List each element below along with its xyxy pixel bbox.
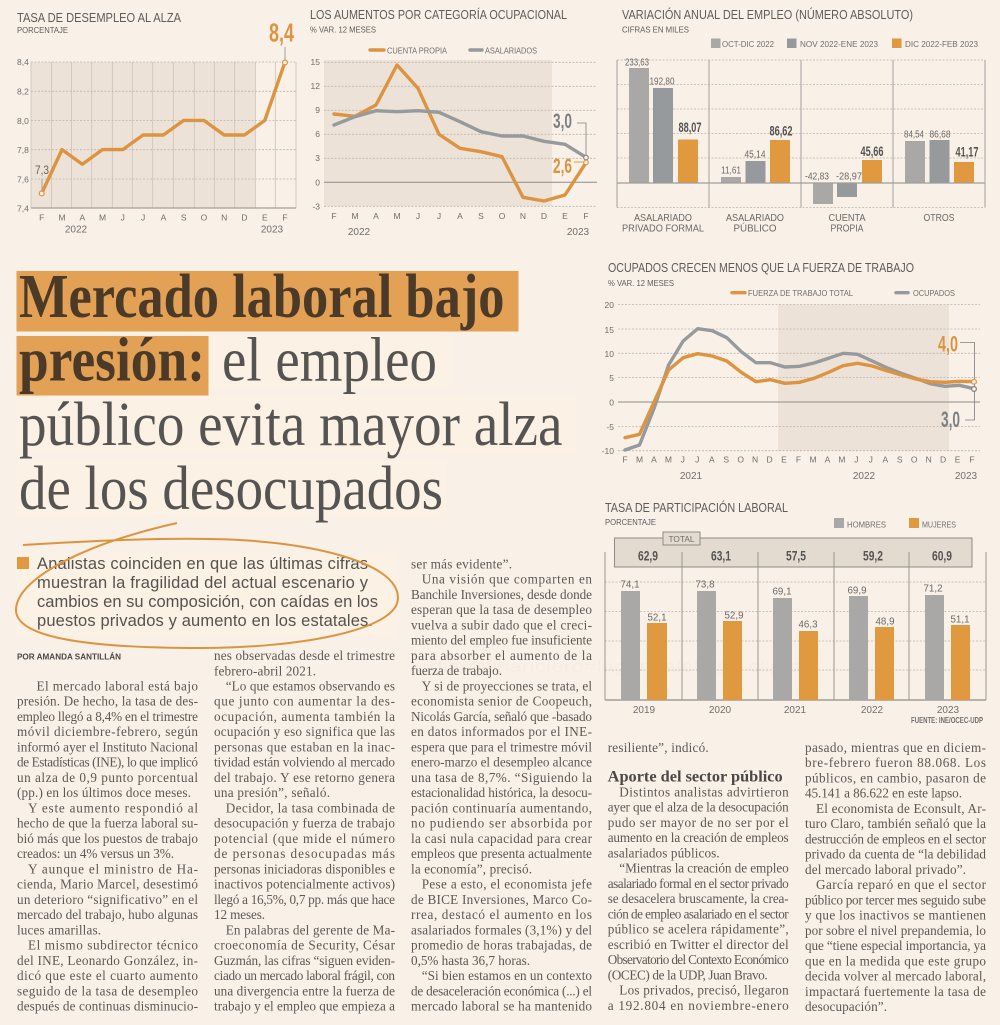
- chart: los aumentos por categoría ocupacional: 15: [311, 57, 320, 67]
- text column 3: enero-marzo el desempleo alcance: [411, 755, 592, 770]
- text column 1: Y este aumento respondió al: [28, 800, 198, 815]
- chart: ocupados crecen menos que la fuerza de trabajo: A: [825, 454, 831, 464]
- callout: bajada: Analistas coinciden en que las últimas cifras: [37, 555, 368, 573]
- text column 4: Aporte del sector público: [608, 769, 783, 786]
- chart: variación anual del empleo: -42,83: [805, 171, 829, 182]
- text column 1: bió más que los puestos de trabajo: [17, 831, 198, 846]
- text column 1: del INE, Leonardo González, in-: [17, 953, 198, 968]
- text column 1: un deterioro “significativo” en el: [17, 892, 198, 907]
- text column 3: promedio de horas trabajadas, de: [411, 938, 592, 953]
- chart: los aumentos por categoría ocupacional: 2022: [348, 227, 371, 238]
- text column 3: Nicolás García, señaló que -basado: [411, 709, 592, 724]
- text column 4: ción de empleo asalariado en el sector: [608, 906, 789, 921]
- chart: variación anual del empleo: VARIACIÓN ANUAL DEL EMPLEO (NÚMERO ABSOLUTO): [622, 7, 913, 22]
- chart: ocupados crecen menos que la fuerza de trabajo: O: [911, 454, 918, 464]
- chart: ocupados crecen menos que la fuerza de trabajo: 3,0: [941, 407, 960, 432]
- text column 3: “Si bien estamos en un contexto: [422, 968, 592, 983]
- chart: variación anual del empleo: -28,97: [836, 171, 862, 182]
- text column 3: la casi nula capacidad para crear: [411, 831, 593, 846]
- chart: tasa de participación laboral: 2019: [633, 705, 656, 716]
- text column 4: (OCEC) de la UDP, Juan Bravo.: [608, 967, 768, 982]
- chart: los aumentos por categoría ocupacional: F: [331, 211, 337, 221]
- text column 5: García reparó en que el sector: [816, 877, 987, 892]
- text column 5: y que los inactivos se mantienen: [805, 908, 986, 923]
- text column 5: privado da cuenta de “la debilidad: [805, 847, 986, 862]
- chart: ocupados crecen menos que la fuerza de trabajo: F: [796, 454, 801, 464]
- text column 4: se desacelera bruscamente, la crea-: [608, 891, 789, 906]
- chart: variación anual del empleo: 45,14: [744, 150, 766, 161]
- chart: tasa de participación laboral: 57,5: [786, 548, 806, 564]
- chart: tasa de participación laboral: PORCENTAJE: [605, 517, 656, 527]
- chart: los aumentos por categoría ocupacional: % VAR. 12 MESES: [310, 24, 376, 34]
- text column 3: rrea, destacó el aumento en los: [411, 907, 592, 922]
- text column 2: que junto con aumentar la des-: [214, 694, 395, 709]
- text column 3: una tasa de 8,7%. “Siguiendo la: [411, 770, 592, 785]
- chart: variación anual del empleo: PROPIA: [830, 224, 864, 234]
- text column 3: [411, 556, 593, 1014]
- headline: el empleo: [222, 326, 437, 394]
- text column 3: para absorber el aumento de la: [411, 648, 592, 663]
- text column 4: Observatorio del Contexto Económico: [608, 952, 789, 967]
- chart: tasa de desempleo al alza: A: [161, 212, 167, 222]
- chart: tasa de desempleo al alza: F: [39, 212, 44, 222]
- chart: tasa de desempleo al alza: 8,4: [269, 18, 294, 48]
- text column 5: impactará fuertemente la tasa de: [805, 984, 986, 999]
- chart: ocupados crecen menos que la fuerza de trabajo: D: [767, 454, 773, 464]
- chart: tasa de desempleo al alza: A: [79, 212, 85, 222]
- chart: variación anual del empleo: DIC 2022-FEB 2023: [905, 39, 978, 49]
- chart: tasa de participación laboral: 52,1: [648, 613, 667, 624]
- chart: variación anual del empleo: [617, 7, 985, 234]
- chart: ocupados crecen menos que la fuerza de trabajo: M: [636, 454, 643, 464]
- text column 5: [805, 740, 987, 1014]
- chart: tasa de participación laboral: MUJERES: [922, 520, 956, 530]
- chart: ocupados crecen menos que la fuerza de trabajo: 4,0: [938, 332, 958, 357]
- text column 2: personas que estaban en la inac-: [214, 740, 395, 754]
- chart: tasa de desempleo al alza: 8,4: [17, 57, 29, 67]
- chart: variación anual del empleo: PRIVADO FORMAL: [622, 224, 704, 234]
- text column 3: de BICE Inversiones, Marco Co-: [411, 892, 592, 907]
- text column 3: Y si de proyecciones se trata, el: [422, 678, 592, 694]
- chart: variación anual del empleo: PÚBLICO: [734, 222, 777, 234]
- text column 3: pación continuaría aumentando,: [411, 800, 592, 815]
- text column 4: resiliente”, indicó.: [608, 740, 709, 755]
- chart: los aumentos por categoría ocupacional: N: [520, 211, 526, 221]
- chart: ocupados crecen menos que la fuerza de trabajo: N: [926, 454, 932, 464]
- text column 1: [17, 678, 198, 1014]
- chart: los aumentos por categoría ocupacional: 12: [311, 81, 320, 91]
- chart: ocupados crecen menos que la fuerza de trabajo: 2021: [680, 471, 703, 482]
- chart: ocupados crecen menos que la fuerza de trabajo: M: [665, 454, 672, 464]
- chart: ocupados crecen menos que la fuerza de trabajo: J: [681, 454, 685, 464]
- chart: tasa de desempleo al alza: M: [58, 212, 66, 222]
- chart: ocupados crecen menos que la fuerza de trabajo: N: [752, 454, 758, 464]
- chart: variación anual del empleo: 192,80: [650, 76, 675, 87]
- chart: tasa de desempleo al alza: 8,2: [17, 86, 29, 96]
- callout: bajada: cambios en su composición, con caídas en los: [37, 593, 378, 611]
- text column 4: escribió en Twitter el director del: [608, 937, 789, 952]
- chart: tasa de desempleo al alza: O: [201, 212, 208, 222]
- chart: tasa de participación laboral: 52,9: [724, 611, 744, 622]
- text column 1: El mismo subdirector técnico: [28, 938, 198, 953]
- text column 2: desocupación y fuerza de trabajo: [214, 816, 395, 831]
- callout: bajada: muestran la fragilidad del actual escenario y: [37, 574, 369, 592]
- text column 3: no pudiendo ser absorbida por: [411, 816, 593, 831]
- text column 1: Y aunque el ministro de Ha-: [28, 861, 198, 876]
- chart: variación anual del empleo: CIFRAS EN MILES: [622, 24, 689, 34]
- text column 4: Los privados, precisó, llegaron: [619, 983, 789, 998]
- text column 1: de Estadísticas (INE), lo que implicó: [17, 755, 198, 770]
- chart: ocupados crecen menos que la fuerza de trabajo: M: [838, 454, 845, 464]
- chart: los aumentos por categoría ocupacional: J: [437, 211, 441, 221]
- text column 2: 12 meses.: [214, 907, 265, 922]
- text column 1: un alza de 0,9 punto porcentual: [17, 770, 198, 785]
- chart: los aumentos por categoría ocupacional: 9: [315, 105, 320, 115]
- text column 3: en datos informados por el INE-: [411, 724, 592, 739]
- text column 3: vuelva a subir dado que el creci-: [411, 618, 592, 632]
- text column 2: una divergencia entre la fuerza de: [214, 983, 395, 998]
- chart: ocupados crecen menos que la fuerza de trabajo: 5: [609, 373, 614, 383]
- chart: tasa de desempleo al alza: N: [221, 212, 227, 222]
- text column 3: Pese a esto, el economista jefe: [422, 877, 592, 892]
- chart: variación anual del empleo: CUENTA: [828, 213, 866, 224]
- chart: tasa de participación laboral: 63,1: [711, 548, 731, 564]
- chart: tasa de participación laboral: 2021: [784, 705, 807, 716]
- chart: tasa de participación laboral: 59,2: [863, 548, 883, 564]
- text column 5: públicos, en cambio, pasaron de: [805, 770, 986, 786]
- chart: tasa de participación laboral: 2020: [709, 705, 732, 716]
- chart: ocupados crecen menos que la fuerza de trabajo: OCUPADOS: [913, 288, 955, 298]
- chart: ocupados crecen menos que la fuerza de trabajo: F: [969, 454, 975, 464]
- text column 5: desocupación”.: [805, 999, 887, 1014]
- text column 4: a 192.804 en noviembre-enero: [608, 998, 789, 1013]
- chart: ocupados crecen menos que la fuerza de trabajo: M: [809, 454, 817, 464]
- chart: los aumentos por categoría ocupacional: J: [416, 211, 420, 221]
- text column 1: móvil diciembre-febrero, según: [17, 724, 198, 739]
- chart: los aumentos por categoría ocupacional: 3: [315, 153, 320, 163]
- text column 1: luces amarillas.: [17, 922, 101, 937]
- text column 5: destrucción de empleos en el sector: [805, 831, 987, 846]
- chart: ocupados crecen menos que la fuerza de trabajo: J: [695, 454, 699, 464]
- text column 2: Decidor, la tasa combinada de: [226, 800, 395, 815]
- chart: ocupados crecen menos que la fuerza de trabajo: O: [737, 454, 744, 464]
- chart: tasa de participación laboral: 74,1: [620, 580, 640, 591]
- chart: tasa de desempleo al alza: PORCENTAJE: [17, 25, 68, 35]
- headline: público evita mayor alza: [19, 391, 562, 459]
- chart: tasa de desempleo al alza: 2022: [65, 225, 88, 236]
- chart: tasa de desempleo al alza: 2023: [261, 225, 284, 236]
- chart: los aumentos por categoría ocupacional: [310, 7, 597, 238]
- chart: los aumentos por categoría ocupacional: LOS AUMENTOS POR CATEGORÍA OCUPACIONAL: [310, 7, 567, 22]
- chart: tasa de participación laboral: 71,2: [924, 584, 943, 595]
- chart: tasa de participación laboral: 51,1: [950, 615, 970, 626]
- text column 4: “Mientras la creación de empleo: [619, 861, 789, 876]
- chart: variación anual del empleo: 84,54: [904, 130, 924, 141]
- chart: los aumentos por categoría ocupacional: A: [457, 211, 463, 221]
- chart: tasa de desempleo al alza: [17, 11, 296, 236]
- text column 2: ciado un mercado laboral frágil, con: [214, 968, 395, 983]
- text column 3: empleos que presenta actualmente: [411, 846, 592, 861]
- chart: ocupados crecen menos que la fuerza de trabajo: E: [781, 454, 787, 464]
- text column 1: El mercado laboral está bajo: [36, 678, 198, 694]
- text column 3: de desaceleración económica (...) el: [411, 983, 592, 998]
- chart: tasa de desempleo al alza: 8,0: [17, 116, 29, 126]
- chart: ocupados crecen menos que la fuerza de trabajo: OCUPADOS CRECEN MENOS QUE LA FUERZA DE TRABAJO: [608, 261, 914, 275]
- text column 1: informó ayer el Instituto Nacional: [17, 740, 198, 754]
- text column 4: [608, 740, 789, 1013]
- chart: ocupados crecen menos que la fuerza de trabajo: E: [955, 454, 961, 464]
- text column 1: creados: un 4% versus un 3%.: [17, 846, 174, 861]
- chart: ocupados crecen menos que la fuerza de trabajo: -5: [606, 422, 614, 432]
- chart: los aumentos por categoría ocupacional: M: [351, 211, 359, 221]
- chart: los aumentos por categoría ocupacional: 2023: [567, 227, 590, 238]
- chart: variación anual del empleo: 233,63: [625, 58, 649, 69]
- chart: tasa de participación laboral: 48,9: [876, 617, 895, 628]
- chart: ocupados crecen menos que la fuerza de trabajo: F: [622, 454, 628, 464]
- chart: los aumentos por categoría ocupacional: A: [373, 211, 379, 221]
- text column 4: aumento en la creación de empleos: [608, 830, 789, 845]
- callout: bajada: [16, 523, 398, 648]
- text column 3: fuerza de trabajo.: [411, 663, 502, 678]
- chart: los aumentos por categoría ocupacional: 6: [315, 129, 320, 139]
- chart: tasa de desempleo al alza: J: [141, 212, 145, 222]
- chart: ocupados crecen menos que la fuerza de trabajo: J: [854, 454, 859, 464]
- chart: ocupados crecen menos que la fuerza de trabajo: FUERZA DE TRABAJO TOTAL: [748, 288, 853, 298]
- text column 3: esperan que la tasa de desempleo: [411, 602, 592, 617]
- chart: variación anual del empleo: 86,68: [930, 130, 951, 141]
- chart: ocupados crecen menos que la fuerza de trabajo: -10: [602, 446, 614, 456]
- text column 4: asalariado formal en el sector privado: [608, 876, 789, 891]
- chart: tasa de desempleo al alza: D: [241, 212, 248, 222]
- text column 3: estacionalidad histórica, la desocu-: [411, 785, 592, 800]
- text column 3: ser más evidente”.: [411, 556, 512, 572]
- chart: tasa de participación laboral: 69,1: [772, 587, 792, 598]
- chart: ocupados crecen menos que la fuerza de trabajo: % VAR. 12 MESES: [608, 278, 674, 288]
- chart: los aumentos por categoría ocupacional: 2,6: [553, 155, 572, 178]
- chart: ocupados crecen menos que la fuerza de trabajo: A: [651, 454, 657, 464]
- chart: variación anual del empleo: OCT-DIC 2022: [722, 39, 774, 49]
- chart: tasa de desempleo al alza: 7,3: [35, 165, 49, 177]
- chart: los aumentos por categoría ocupacional: 3,0: [553, 110, 572, 133]
- text column 2: febrero-abril 2021.: [214, 663, 316, 678]
- headline: presión:: [19, 326, 205, 394]
- text column 3: Banchile Inversiones, desde donde: [411, 587, 592, 602]
- text column 5: bre-febrero fueron 88.068. Los: [805, 755, 986, 770]
- chart: tasa de participación laboral: 2022: [861, 705, 884, 716]
- text column 1: cienda, Mario Marcel, desestimó: [17, 877, 198, 892]
- text column 2: Guzmán, las cifras “siguen eviden-: [214, 953, 395, 968]
- text column 5: del mercado laboral privado”.: [805, 862, 966, 877]
- chart: ocupados crecen menos que la fuerza de trabajo: 0: [609, 398, 614, 408]
- chart: los aumentos por categoría ocupacional: D: [541, 211, 547, 221]
- text column 2: croeconomía de Security, César: [214, 938, 396, 953]
- text column 2: del trabajo. Y ese retorno genera: [214, 770, 395, 785]
- chart: ocupados crecen menos que la fuerza de trabajo: D: [940, 454, 946, 464]
- text column 3: 0,5% hasta 36,7 horas.: [411, 953, 530, 968]
- text column 2: nes observadas desde el trimestre: [214, 648, 395, 663]
- chart: los aumentos por categoría ocupacional: CUENTA PROPIA: [387, 46, 447, 56]
- text column 4: ayer que el alza de la desocupación: [608, 800, 789, 815]
- chart: variación anual del empleo: 45,66: [860, 143, 884, 159]
- chart: variación anual del empleo: 88,07: [678, 119, 702, 135]
- text column 2: trabajo y el empleo que empieza a: [214, 998, 395, 1014]
- chart: tasa de participación laboral: 69,9: [848, 586, 867, 597]
- chart: los aumentos por categoría ocupacional: ASALARIADOS: [485, 46, 537, 56]
- text column 3: miento del empleo fue insuficiente: [411, 633, 592, 648]
- chart: ocupados crecen menos que la fuerza de trabajo: A: [709, 454, 715, 464]
- text column 1: mercado del trabajo, hubo algunas: [17, 907, 198, 922]
- text column 5: que “tiene especial importancia, ya: [805, 938, 986, 953]
- text column 4: público se acelera rápidamente”,: [608, 922, 789, 937]
- text: diariofinanciero#lagonzalek@e-clip.cl: [430, 657, 805, 676]
- chart: ocupados crecen menos que la fuerza de trabajo: 20: [605, 300, 614, 310]
- text column 1: dicó que este el cuarto aumento: [17, 968, 198, 983]
- chart: los aumentos por categoría ocupacional: -3: [312, 202, 320, 212]
- chart: los aumentos por categoría ocupacional: O: [499, 211, 506, 221]
- text column 5: turo Claro, también señaló que la: [805, 816, 986, 831]
- chart: ocupados crecen menos que la fuerza de trabajo: 15: [605, 325, 614, 335]
- text column 3: mercado laboral se ha mantenido: [411, 998, 592, 1014]
- text column 5: público por tercer mes seguido sube: [805, 892, 986, 907]
- text column 1: presión. De hecho, la tasa de des-: [17, 694, 198, 709]
- chart: ocupados crecen menos que la fuerza de trabajo: 10: [605, 349, 614, 359]
- chart: los aumentos por categoría ocupacional: F: [583, 211, 589, 221]
- chart: tasa de participación laboral: 60,9: [932, 548, 952, 564]
- chart: tasa de desempleo al alza: J: [121, 212, 125, 222]
- chart: variación anual del empleo: 11,61: [721, 165, 741, 176]
- chart: variación anual del empleo: OTROS: [924, 213, 955, 224]
- text column 5: que en la medida que este grupo: [805, 953, 986, 968]
- text column 3: la economía”, precisó.: [411, 861, 532, 876]
- text column 1: (pp.) en los últimos doce meses.: [17, 785, 191, 800]
- text column 2: personas iniciadoras disponibles e: [214, 861, 395, 876]
- text column 1: empleo llegó a 8,4% en el trimestre: [17, 709, 198, 724]
- text column 5: por sobre el nivel prepandemia, lo: [805, 923, 986, 938]
- chart: los aumentos por categoría ocupacional: E: [562, 211, 568, 221]
- chart: tasa de desempleo al alza: E: [262, 212, 268, 222]
- text column 4: Distintos analistas advirtieron: [619, 784, 789, 800]
- chart: tasa de desempleo al alza: F: [282, 212, 288, 222]
- chart: ocupados crecen menos que la fuerza de trabajo: J: [869, 454, 873, 464]
- chart: tasa de participación laboral: 46,3: [798, 620, 818, 631]
- headline: de los desocupados: [19, 455, 443, 523]
- text column 1: seguido de la tasa de desempleo: [17, 983, 198, 998]
- text column 5: 45.141 a 86.622 en este lapso.: [805, 786, 962, 801]
- chart: variación anual del empleo: NOV 2022-ENE 2023: [800, 39, 878, 49]
- chart: ocupados crecen menos que la fuerza de trabajo: 2023: [955, 471, 978, 482]
- chart: variación anual del empleo: ASALARIADO: [634, 213, 692, 224]
- text column 2: ocupación y eso significa que las: [214, 724, 395, 739]
- byline: POR AMANDA SANTILLÁN: [17, 652, 121, 662]
- text column 2: de personas desocupadas más: [214, 846, 395, 861]
- chart: tasa de desempleo al alza: M: [99, 212, 106, 222]
- chart: tasa de desempleo al alza: 7,4: [17, 204, 29, 214]
- text column 1: hecho de que la fuerza laboral su-: [17, 816, 198, 831]
- chart: los aumentos por categoría ocupacional: M: [393, 211, 401, 221]
- text column 3: Una visión que comparten en: [422, 572, 592, 587]
- chart: los aumentos por categoría ocupacional: 0: [315, 178, 320, 188]
- text column 5: pasado, mientras que en diciem-: [805, 740, 986, 755]
- text column 3: economista senior de Coopeuch,: [411, 694, 592, 709]
- text column 1: después de continuas disminucio-: [17, 998, 198, 1014]
- chart: ocupados crecen menos que la fuerza de trabajo: 2022: [853, 471, 876, 482]
- text column 3: asalariados formales (3,1%) y del: [411, 922, 592, 937]
- chart: tasa de participación laboral: 73,8: [696, 580, 715, 591]
- chart: ocupados crecen menos que la fuerza de trabajo: [602, 261, 980, 482]
- text column 2: inactivos potencialmente activos): [214, 877, 395, 892]
- chart: tasa de desempleo al alza: 7,8: [17, 145, 29, 155]
- chart: ocupados crecen menos que la fuerza de trabajo: A: [882, 454, 888, 464]
- chart: tasa de participación laboral: [605, 500, 986, 725]
- callout: bajada: puestos privados y aumento en los estatales.: [37, 612, 373, 630]
- chart: los aumentos por categoría ocupacional: S: [478, 211, 484, 221]
- chart: tasa de participación laboral: 2023: [937, 705, 960, 716]
- chart: variación anual del empleo: ASALARIADO: [726, 213, 784, 224]
- headline: [16, 263, 576, 523]
- chart: variación anual del empleo: 86,62: [770, 123, 793, 139]
- text column 2: potencial (que mide el número: [214, 831, 395, 846]
- text column 4: asalariados públicos.: [608, 846, 720, 860]
- chart: variación anual del empleo: 41,17: [956, 144, 979, 160]
- chart: tasa de participación laboral: HOMBRES: [847, 520, 886, 530]
- text column 2: llegó a 16,5%, 0,7 pp. más que hace: [214, 892, 395, 907]
- text column 2: tividad están volviendo al mercado: [214, 755, 395, 770]
- text column 2: [214, 648, 396, 1014]
- text column 2: “Lo que estamos observando es: [226, 678, 395, 694]
- text column 2: una presión”, señaló.: [214, 785, 330, 800]
- chart: tasa de participación laboral: TOTAL: [668, 534, 695, 544]
- chart: tasa de participación laboral: 62,9: [638, 548, 658, 564]
- chart: tasa de participación laboral: TASA DE PARTICIPACIÓN LABORAL: [605, 500, 788, 515]
- chart: tasa de desempleo al alza: S: [181, 212, 187, 222]
- text column 3: espera que para el trimestre móvil: [411, 740, 592, 754]
- text column 2: En palabras del gerente de Ma-: [226, 922, 395, 937]
- chart: tasa de desempleo al alza: TASA DE DESEMPLEO AL ALZA: [17, 11, 182, 25]
- headline: Mercado laboral bajo: [19, 263, 504, 331]
- chart: tasa de desempleo al alza: 7,6: [17, 174, 29, 184]
- text column 5: decida volver al mercado laboral,: [805, 969, 986, 984]
- chart: ocupados crecen menos que la fuerza de trabajo: S: [897, 454, 903, 464]
- text column 2: ocupación, aumenta también la: [214, 709, 395, 724]
- text column 5: El economista de Econsult, Ar-: [816, 801, 986, 816]
- text column 4: pudo ser mayor de no ser por el: [608, 815, 789, 830]
- chart: ocupados crecen menos que la fuerza de trabajo: S: [723, 454, 729, 464]
